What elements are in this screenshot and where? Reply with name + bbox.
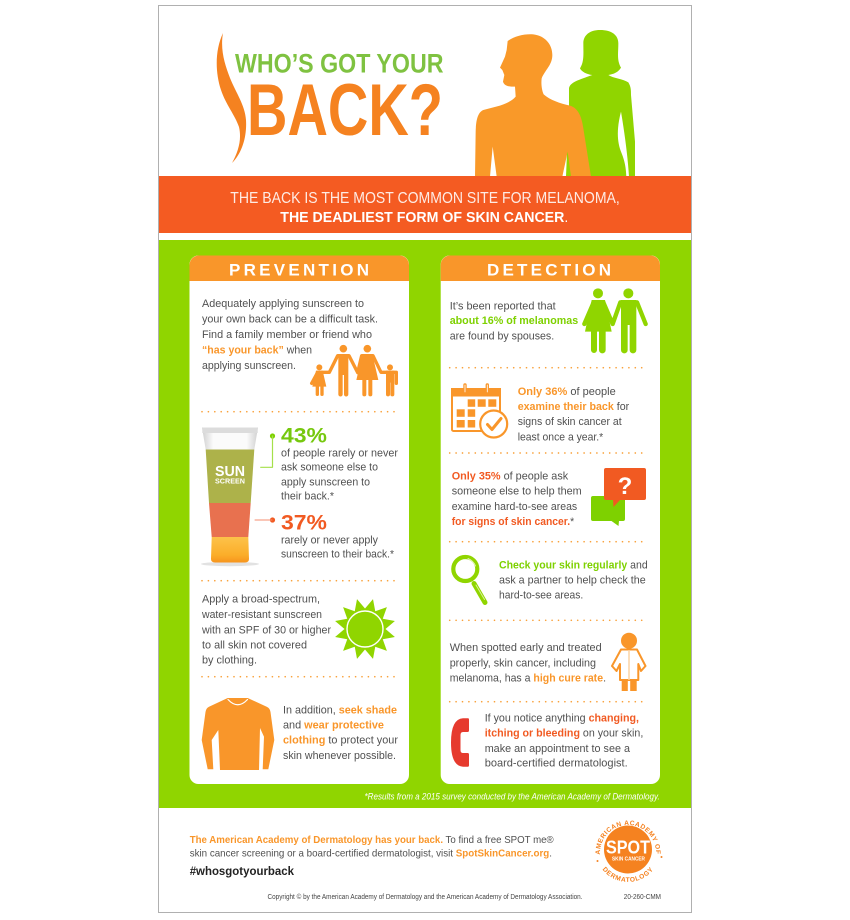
stat: 43%: apply sunscreen to: [281, 476, 370, 488]
text: has your back: [202, 298, 378, 372]
SPOT badge: SPOT: [606, 838, 650, 858]
text: see a dermatologist: board-certified dermatologist.: [485, 758, 628, 770]
text: check your skin: hard-to-see areas.: [499, 590, 583, 602]
woman silhouette: [566, 30, 635, 177]
SPOT badge: [595, 820, 662, 882]
SPOT badge: DERMATOLOGY: [602, 866, 652, 882]
tube label: SUN: [215, 463, 245, 480]
text: ask someone else: someone else to help them: [452, 486, 582, 498]
text: has your back: Adequately applying sunscreen to: [202, 298, 364, 310]
green background: [159, 240, 691, 808]
stat: 43%: their back.*: [281, 490, 335, 502]
banner line two: THE DEADLIEST FORM OF SKIN CANCER.: [280, 210, 568, 226]
text: high cure rate: When spotted early and treated: [450, 642, 602, 654]
hashtag: #whosgotyourback: [190, 864, 294, 878]
text: ask someone else: Only 35% of people ask: [452, 471, 569, 483]
text: ask someone else: [452, 471, 582, 528]
text: broad-spectrum sunscreen: water-resistant sunscreen: [201, 609, 322, 621]
panel body: [441, 256, 660, 784]
illustration: sunscreen tube: [201, 428, 259, 566]
text: broad-spectrum sunscreen: to all skin not covered: [202, 639, 307, 651]
text: found by spouses: [450, 300, 578, 342]
text: examine their back: signs of skin cancer at: [518, 416, 622, 428]
divider: [450, 541, 648, 543]
connector: 37%: [255, 517, 275, 523]
prevention header bar: [190, 256, 409, 281]
text: has your back: “has your back” when: [202, 345, 312, 357]
connector: 43%: [261, 433, 275, 467]
text: check your skin: ask a partner to help check the: [499, 574, 646, 586]
SPOT badge: AMERICAN ACADEMY OF: [595, 820, 661, 854]
panel: detection: [441, 256, 660, 784]
icon: family: [312, 345, 396, 396]
text: examine their back: Only 36% of people: [518, 386, 616, 398]
text: high cure rate: melanoma, has a high cure rate.: [450, 672, 606, 684]
stat: 37%: [281, 510, 395, 560]
text: ask someone else: for signs of skin cancer.*: [452, 516, 575, 528]
text: has your back: applying sunscreen.: [202, 360, 296, 372]
copyright: Copyright © by the American Academy of Dermatology and the American Academy of Dermatology Association.: [268, 893, 583, 901]
title line two: BACK?: [247, 70, 443, 151]
detection header bar: [441, 256, 660, 281]
icon: long-sleeve shirt: [202, 698, 274, 770]
prevention heading: PREVENTION: [229, 260, 369, 279]
stat: 43%: [281, 424, 398, 502]
survey footnote: *Results from a 2015 survey conducted by the American Academy of Dermatology.: [364, 792, 660, 802]
text: found by spouses: are found by spouses.: [450, 330, 554, 342]
divider: [450, 701, 648, 703]
stat: 37%: rarely or never apply: [281, 534, 378, 546]
text: found by spouses: about 16% of melanomas: [450, 315, 578, 327]
document code: 20-260-CMM: [624, 894, 661, 901]
text: examine their back: least once a year.*: [518, 431, 604, 443]
panel body: [190, 256, 409, 784]
text: high cure rate: [450, 642, 606, 684]
stat: 37%: sunscreen to their back.*: [281, 548, 395, 560]
text: has your back: your own back can be a difficult task.: [202, 314, 378, 326]
panel: prevention: [190, 256, 409, 784]
stat: 43%: 43%: [281, 424, 327, 448]
text: see a dermatologist: [485, 713, 643, 770]
SPOT badge: SKIN CANCER: [612, 856, 645, 862]
divider: [202, 676, 397, 678]
text: see a dermatologist: If you notice anything changing,: [485, 713, 639, 725]
icon: spine swoosh: [217, 33, 246, 163]
stat: 43%: ask someone else to: [281, 462, 378, 474]
footer call to action: skin cancer screening or a board-certified dermatologist, visit SpotSkinCancer.org.: [190, 848, 552, 860]
text: ask someone else: examine hard-to-see areas: [452, 501, 578, 513]
detection heading: DETECTION: [487, 260, 611, 279]
text: examine their back: examine their back for: [518, 401, 629, 413]
icon: patient in gown: [612, 633, 646, 691]
icon: couple: [584, 288, 646, 353]
illustration: sunscreen tube: SCREEN: [215, 476, 245, 485]
stat: 37%: 37%: [281, 510, 327, 534]
text: check your skin: [499, 559, 648, 602]
text: see a dermatologist: make an appointment to see a: [485, 743, 631, 755]
illustration: couple silhouettes: [475, 30, 635, 177]
text: seek shade: In addition, seek shade: [283, 704, 397, 716]
text: found by spouses: It’s been reported that: [450, 300, 557, 312]
text: has your back: Find a family member or friend who: [202, 329, 372, 341]
man silhouette: [475, 34, 591, 177]
text: broad-spectrum sunscreen: [201, 594, 331, 667]
banner background: [159, 176, 691, 233]
text: broad-spectrum sunscreen: by clothing.: [202, 655, 257, 667]
text: seek shade: and wear protective: [283, 720, 384, 732]
divider: [450, 367, 648, 369]
icon: magnifying glass: [453, 557, 485, 602]
footer call to action: [190, 834, 554, 860]
text: check your skin: Check your skin regularly and: [499, 559, 648, 571]
text: examine their back: [518, 386, 629, 443]
icon: speech bubbles: ?: [618, 473, 632, 500]
text: seek shade: skin whenever possible.: [283, 750, 396, 762]
icon: speech bubbles: [591, 468, 646, 526]
divider: [450, 452, 648, 454]
icon: telephone: [451, 718, 469, 767]
text: broad-spectrum sunscreen: with an SPF of 30 or higher: [201, 624, 331, 636]
page frame: [158, 6, 692, 912]
title line one: WHO’S GOT YOUR: [235, 49, 444, 79]
footer call to action: The American Academy of Dermatology has your back. To find a free SPOT me®: [190, 834, 554, 846]
title: [217, 33, 444, 163]
banner: [159, 176, 691, 233]
text: seek shade: [283, 704, 398, 762]
icon: sun: [335, 599, 395, 659]
stat: 43%: of people rarely or never: [281, 448, 398, 460]
text: high cure rate: properly, skin cancer, including: [450, 657, 596, 669]
text: see a dermatologist: itching or bleeding on your skin,: [485, 728, 643, 740]
divider: [450, 619, 648, 621]
icon: calendar with check: [451, 385, 507, 438]
divider: [202, 580, 397, 582]
divider: [202, 411, 397, 413]
text: broad-spectrum sunscreen: Apply a broad-spectrum,: [202, 594, 320, 606]
text: seek shade: clothing to protect your: [283, 735, 398, 747]
banner line one: THE BACK IS THE MOST COMMON SITE FOR MELANOMA,: [230, 190, 620, 207]
